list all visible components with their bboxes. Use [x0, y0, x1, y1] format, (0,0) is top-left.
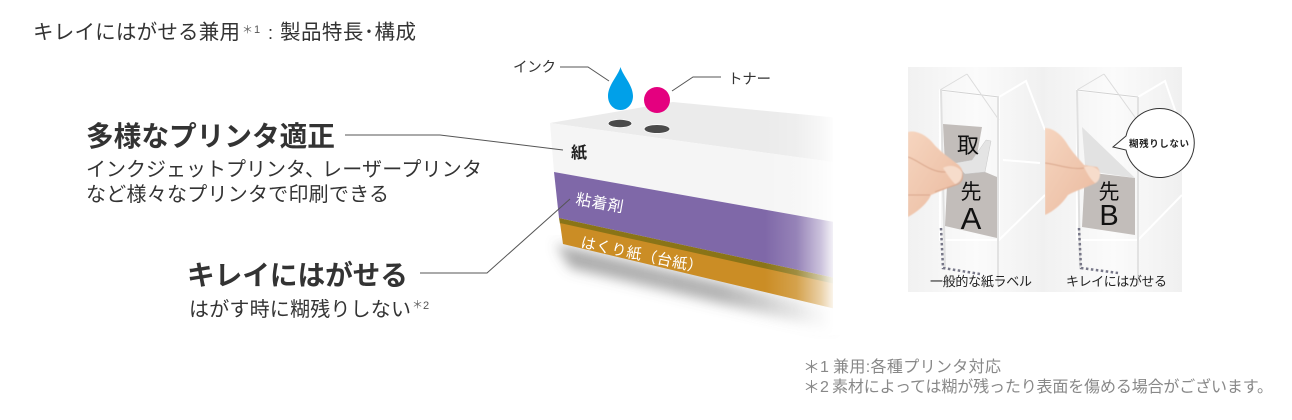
label: adhesive: 粘着剤 [574, 190, 625, 216]
footnotes: ＊ [803, 378, 820, 397]
description: printer compatibility [86, 158, 482, 206]
photo: ordinary paper label [908, 67, 1045, 292]
layer: release paper [560, 223, 840, 310]
label: paper: 紙 [571, 144, 587, 162]
label [1082, 172, 1135, 235]
caption: キレイにはがせる [1066, 274, 1167, 289]
printed dots on paper [608, 119, 670, 134]
title: : [268, 23, 273, 43]
photo: ordinary paper label: 先 [960, 181, 982, 204]
icon: ink drop [608, 67, 633, 110]
description: printer compatibility: レーザープリンタ [322, 158, 482, 181]
description: printer compatibility: など様々なプリンタで印刷できる [86, 183, 389, 206]
photo: ordinary paper label: A [961, 201, 982, 236]
heading: clean removal: キレイにはがせる [187, 260, 408, 291]
title: ＊ [242, 24, 253, 36]
layer: paper top face [550, 102, 840, 163]
description: clean removal: はがす時に糊残りしない [189, 298, 411, 321]
icon: toner particle [644, 87, 670, 113]
dotted holder edge [1079, 228, 1118, 273]
label upper half [943, 124, 982, 165]
diagram: label layer structure [513, 59, 845, 335]
clear holder [1077, 81, 1182, 240]
hand [908, 131, 963, 217]
footnotes [803, 358, 1273, 397]
footnotes: 兼用:各種プリンタ対応 [833, 358, 1001, 376]
fade at right edge [765, 95, 835, 335]
description: printer compatibility: 、 [305, 159, 325, 181]
printed text: 先 [1098, 181, 1120, 204]
footnotes: 2 [820, 379, 829, 396]
label: toner: トナー [728, 72, 771, 88]
heading: printer compatibility: 多様なプリンタ適正 [86, 121, 335, 152]
layer: paper front face [550, 123, 840, 223]
title: キレイにはがせる兼用 [33, 21, 240, 44]
photo: clean-peel label: B [1099, 200, 1119, 232]
footnotes: 素材によっては糊が残ったり表面を傷める場合がございます。 [832, 377, 1273, 396]
speech bubble: 糊残りしない [1129, 138, 1189, 150]
shadow under layers [556, 244, 833, 330]
peeled translucent film [1082, 127, 1135, 178]
leader lines [345, 67, 721, 273]
title [33, 21, 416, 44]
description: printer compatibility: インクジェットプリンタ [86, 158, 306, 181]
peeled film [955, 140, 991, 174]
layer: adhesive [554, 172, 840, 279]
dotted holder edge [941, 228, 980, 274]
hand [1045, 128, 1100, 215]
photo panel: comparison [908, 67, 1182, 292]
description: clean removal: ＊ [412, 299, 423, 311]
text block: printer compatibility [86, 121, 482, 206]
title: 1 [254, 24, 260, 36]
photo: clean-peel label [1045, 67, 1182, 292]
footnotes: 1 [820, 359, 829, 376]
title: 製品特長･構成 [280, 21, 416, 44]
label: release paper: はくり紙（台紙） [579, 234, 704, 277]
label lower half [945, 165, 997, 238]
text block: clean removal [187, 260, 429, 321]
label: ink: インク [513, 59, 556, 76]
footnotes: ＊ [803, 358, 820, 377]
description: clean removal: 2 [423, 300, 429, 312]
layer: adhesive edge [559, 218, 840, 286]
printed text: 取 [957, 133, 979, 158]
speech bubble [1113, 108, 1194, 178]
caption: 一般的な紙ラベル [930, 274, 1032, 289]
clear holder [940, 81, 1045, 240]
